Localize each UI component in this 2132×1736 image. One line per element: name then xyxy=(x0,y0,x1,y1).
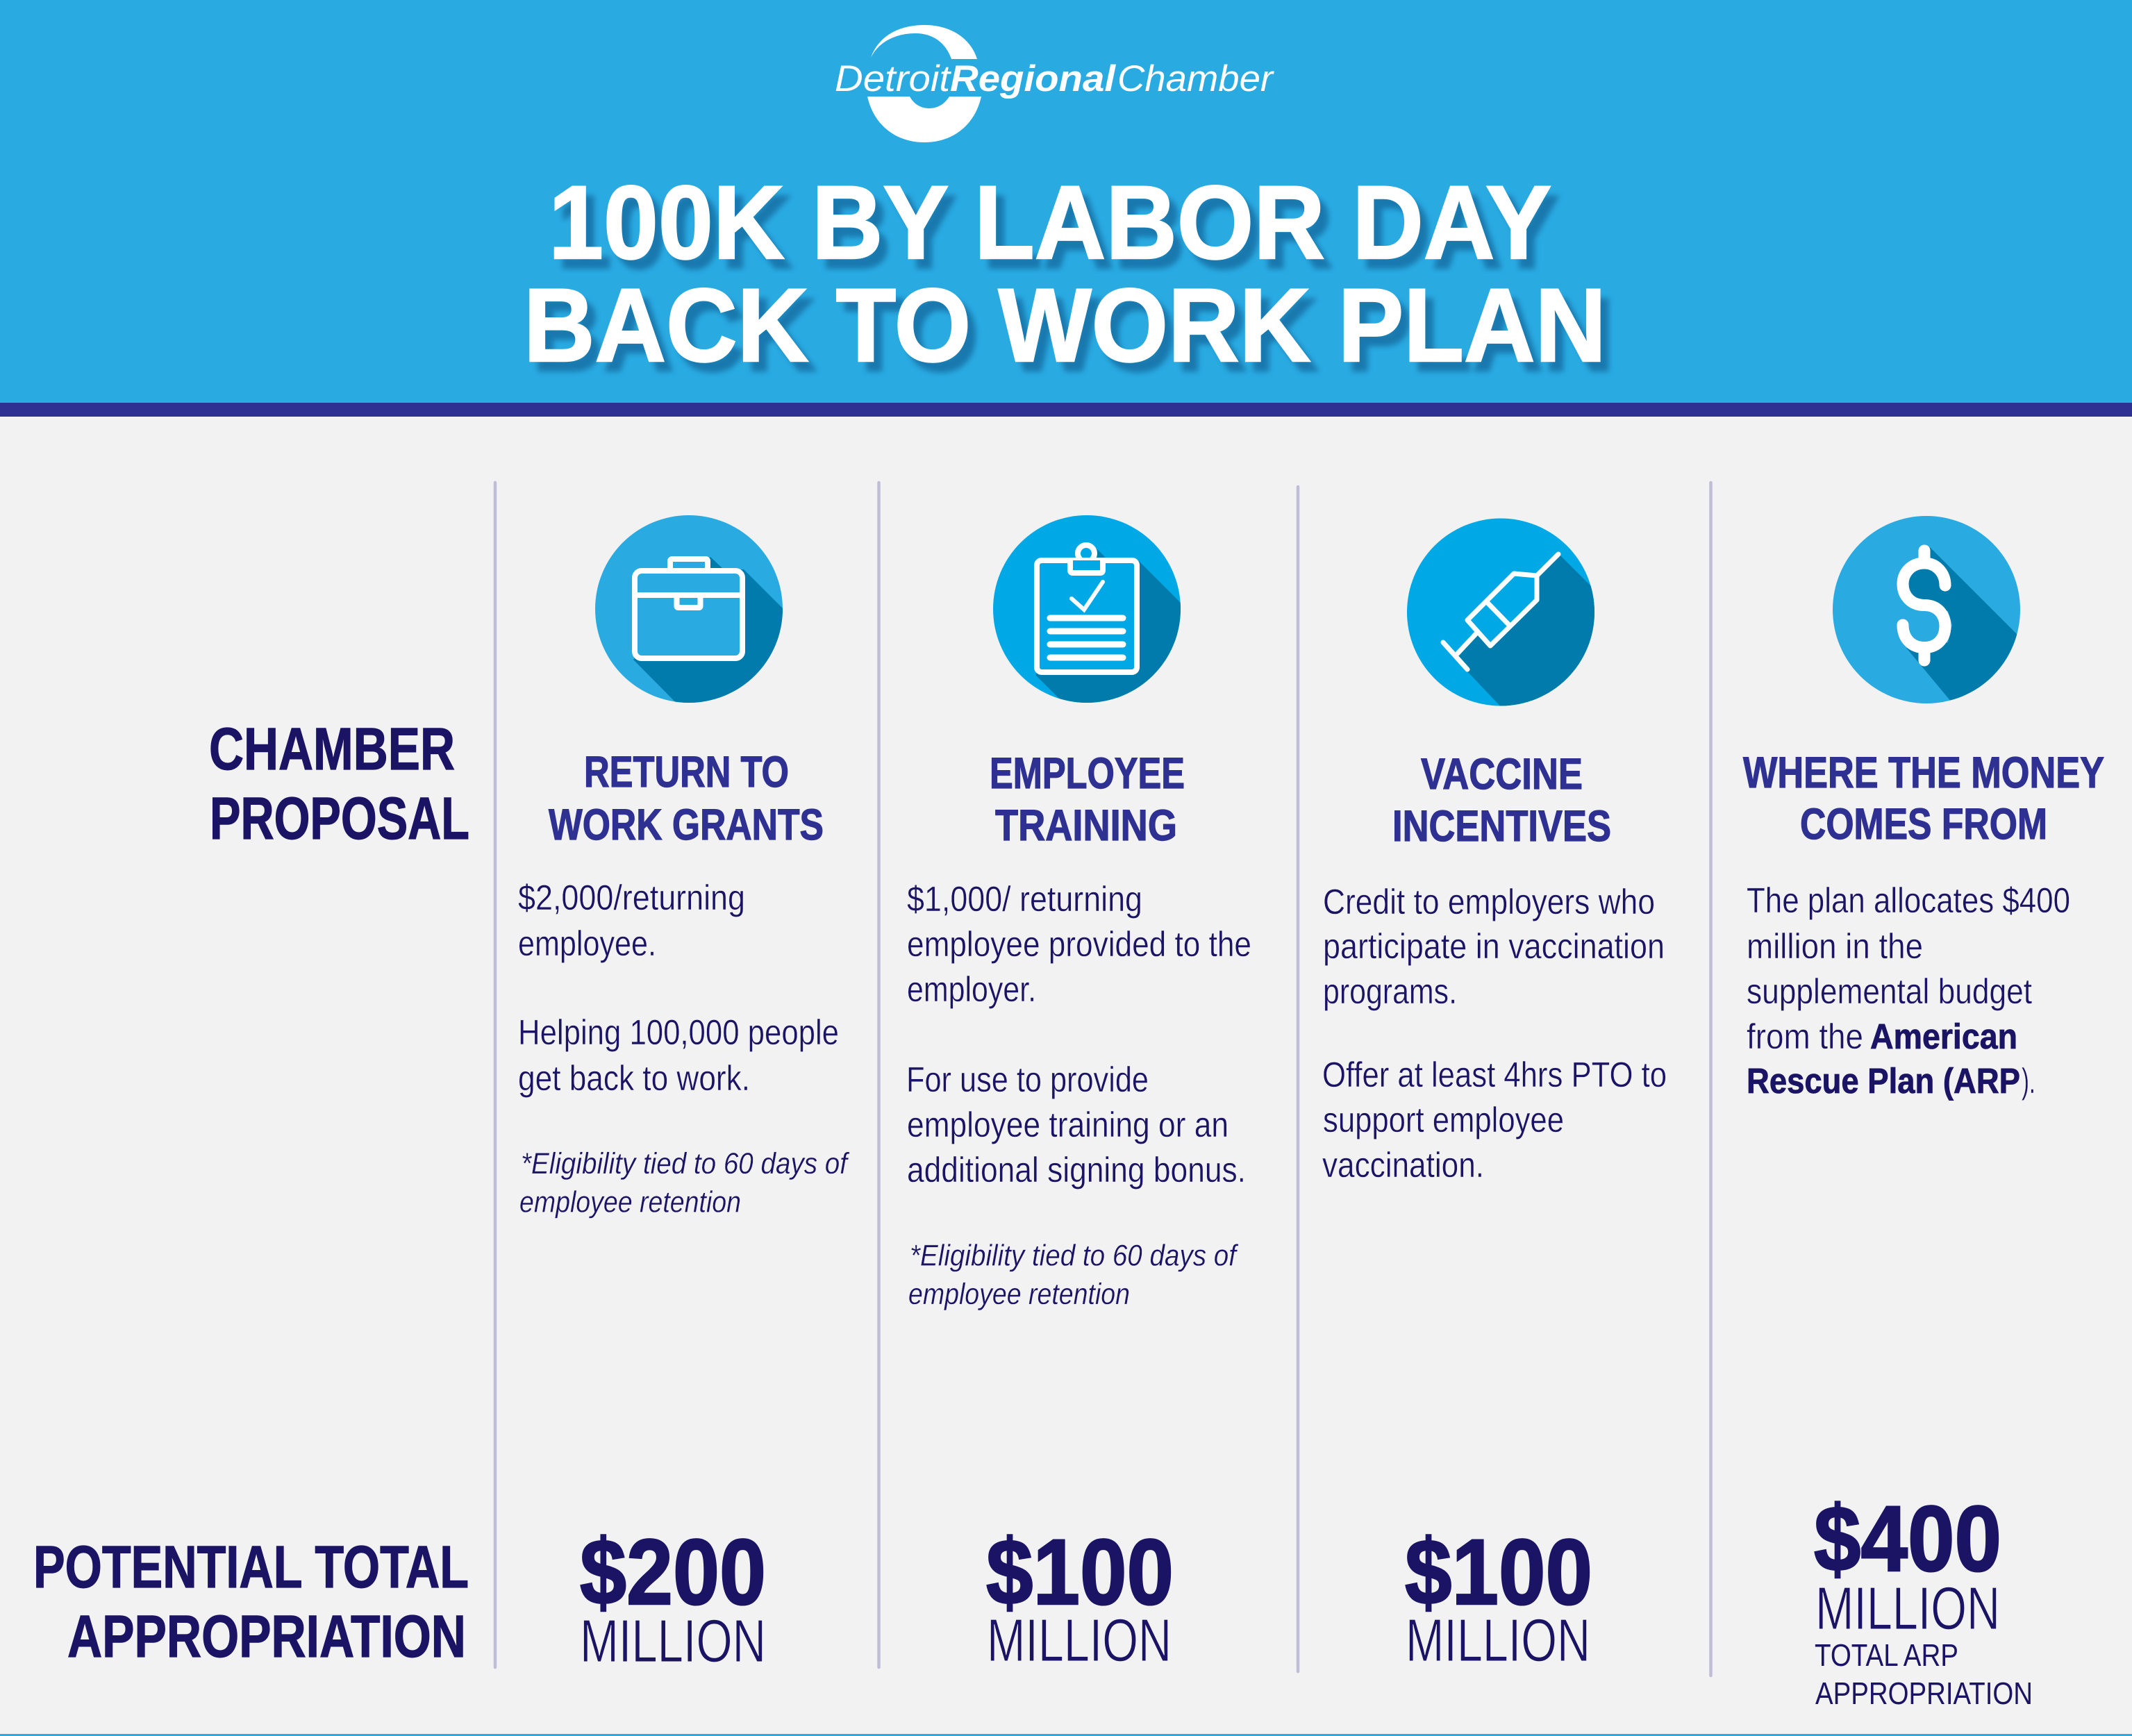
row label: potential total appropriation: POTENTIAL TOTAL xyxy=(33,1534,469,1601)
footnote: employee retention xyxy=(519,1186,741,1219)
heading: VACCINE xyxy=(1421,750,1583,799)
body text: Offer at least 4hrs PTO to xyxy=(1322,1055,1667,1094)
title: BACK TO WORK PLAN xyxy=(524,267,1606,383)
amount: MILLION xyxy=(580,1608,766,1675)
body text: For use to provide xyxy=(906,1060,1149,1099)
row label: potential total appropriation: APPROPRIATION xyxy=(67,1603,466,1670)
body text: additional signing bonus. xyxy=(907,1150,1246,1190)
body text: get back to work. xyxy=(518,1058,750,1098)
body text: ). xyxy=(2022,1061,2035,1101)
heading xyxy=(990,749,1185,850)
body text: Credit to employers who xyxy=(1323,882,1655,921)
body text xyxy=(906,879,1251,1190)
row label: chamber proposal: PROPOSAL xyxy=(210,785,469,852)
footnote: employee retention xyxy=(908,1278,1130,1311)
amount: $100 xyxy=(1405,1521,1592,1624)
heading: EMPLOYEE xyxy=(990,749,1185,798)
body text: employee provided to the xyxy=(907,924,1251,964)
logo: Detroit Regional Chamber: Detroit xyxy=(835,58,951,99)
heading xyxy=(1392,750,1611,851)
body text xyxy=(518,878,839,1098)
body text: million in the xyxy=(1747,926,1923,966)
logo: Detroit Regional Chamber xyxy=(835,25,1274,142)
amount xyxy=(1814,1487,2033,1711)
heading: COMES FROM xyxy=(1800,800,2047,849)
amount: $400 xyxy=(1814,1487,2001,1591)
logo: Detroit Regional Chamber: Chamber xyxy=(1117,58,1274,99)
body text xyxy=(1322,882,1667,1185)
heading xyxy=(1743,749,2104,849)
amount: MILLION xyxy=(1406,1607,1590,1674)
body text xyxy=(1747,880,2070,1101)
panel: return to work grants xyxy=(518,515,850,1662)
logo: Detroit Regional Chamber: Regional xyxy=(950,58,1116,99)
body text: employee training or an xyxy=(907,1105,1229,1144)
amount: MILLION xyxy=(987,1607,1172,1674)
icon: clipboard xyxy=(993,515,1181,703)
amount: $100 xyxy=(986,1521,1174,1624)
panel: vaccine incentives xyxy=(1322,518,1681,1674)
header band xyxy=(0,0,2132,417)
body text: American xyxy=(1870,1017,2017,1056)
heading: RETURN TO xyxy=(584,748,789,796)
row label: chamber proposal xyxy=(209,716,469,852)
heading xyxy=(549,748,824,849)
icon: syringe xyxy=(1407,518,1594,706)
amount xyxy=(580,1521,766,1675)
body text: support employee xyxy=(1323,1100,1564,1140)
body text: participate in vaccination xyxy=(1323,926,1665,966)
body text: Rescue Plan (ARP xyxy=(1747,1061,2020,1101)
footnote xyxy=(519,1147,850,1219)
heading: WORK GRANTS xyxy=(549,801,824,849)
body text: supplemental budget xyxy=(1747,971,2032,1011)
footnote: *Eligibility tied to 60 days of xyxy=(910,1239,1239,1272)
body text: employee. xyxy=(518,924,656,963)
panel: where the money comes from xyxy=(1743,516,2104,1711)
amount: MILLION xyxy=(1815,1575,2000,1642)
footnote xyxy=(908,1239,1239,1311)
heading: INCENTIVES xyxy=(1392,802,1611,851)
body text: programs. xyxy=(1323,971,1457,1011)
heading: TRAINING xyxy=(995,801,1177,850)
amount: APPROPRIATION xyxy=(1815,1676,2033,1711)
body text: $2,000/returning xyxy=(518,878,745,917)
row label: chamber proposal: CHAMBER xyxy=(209,716,455,783)
icon: dollar sign xyxy=(1833,516,2020,703)
body text: from the xyxy=(1747,1017,1863,1056)
amount xyxy=(1405,1521,1592,1674)
body text: employer. xyxy=(907,969,1036,1009)
amount: TOTAL ARP xyxy=(1815,1637,1958,1673)
footnote: *Eligibility tied to 60 days of xyxy=(521,1147,850,1180)
panel: employee training xyxy=(907,515,1250,1661)
icon: briefcase xyxy=(595,515,783,703)
body text: $1,000/ returning xyxy=(907,879,1142,919)
body text: vaccination. xyxy=(1322,1145,1484,1185)
body text: The plan allocates $400 xyxy=(1747,880,2070,920)
row label: potential total appropriation xyxy=(33,1534,469,1670)
title xyxy=(524,164,1606,383)
amount xyxy=(986,1521,1174,1674)
title: 100K BY LABOR DAY xyxy=(549,164,1551,281)
amount: $200 xyxy=(580,1521,766,1624)
body text: Helping 100,000 people xyxy=(518,1012,839,1052)
